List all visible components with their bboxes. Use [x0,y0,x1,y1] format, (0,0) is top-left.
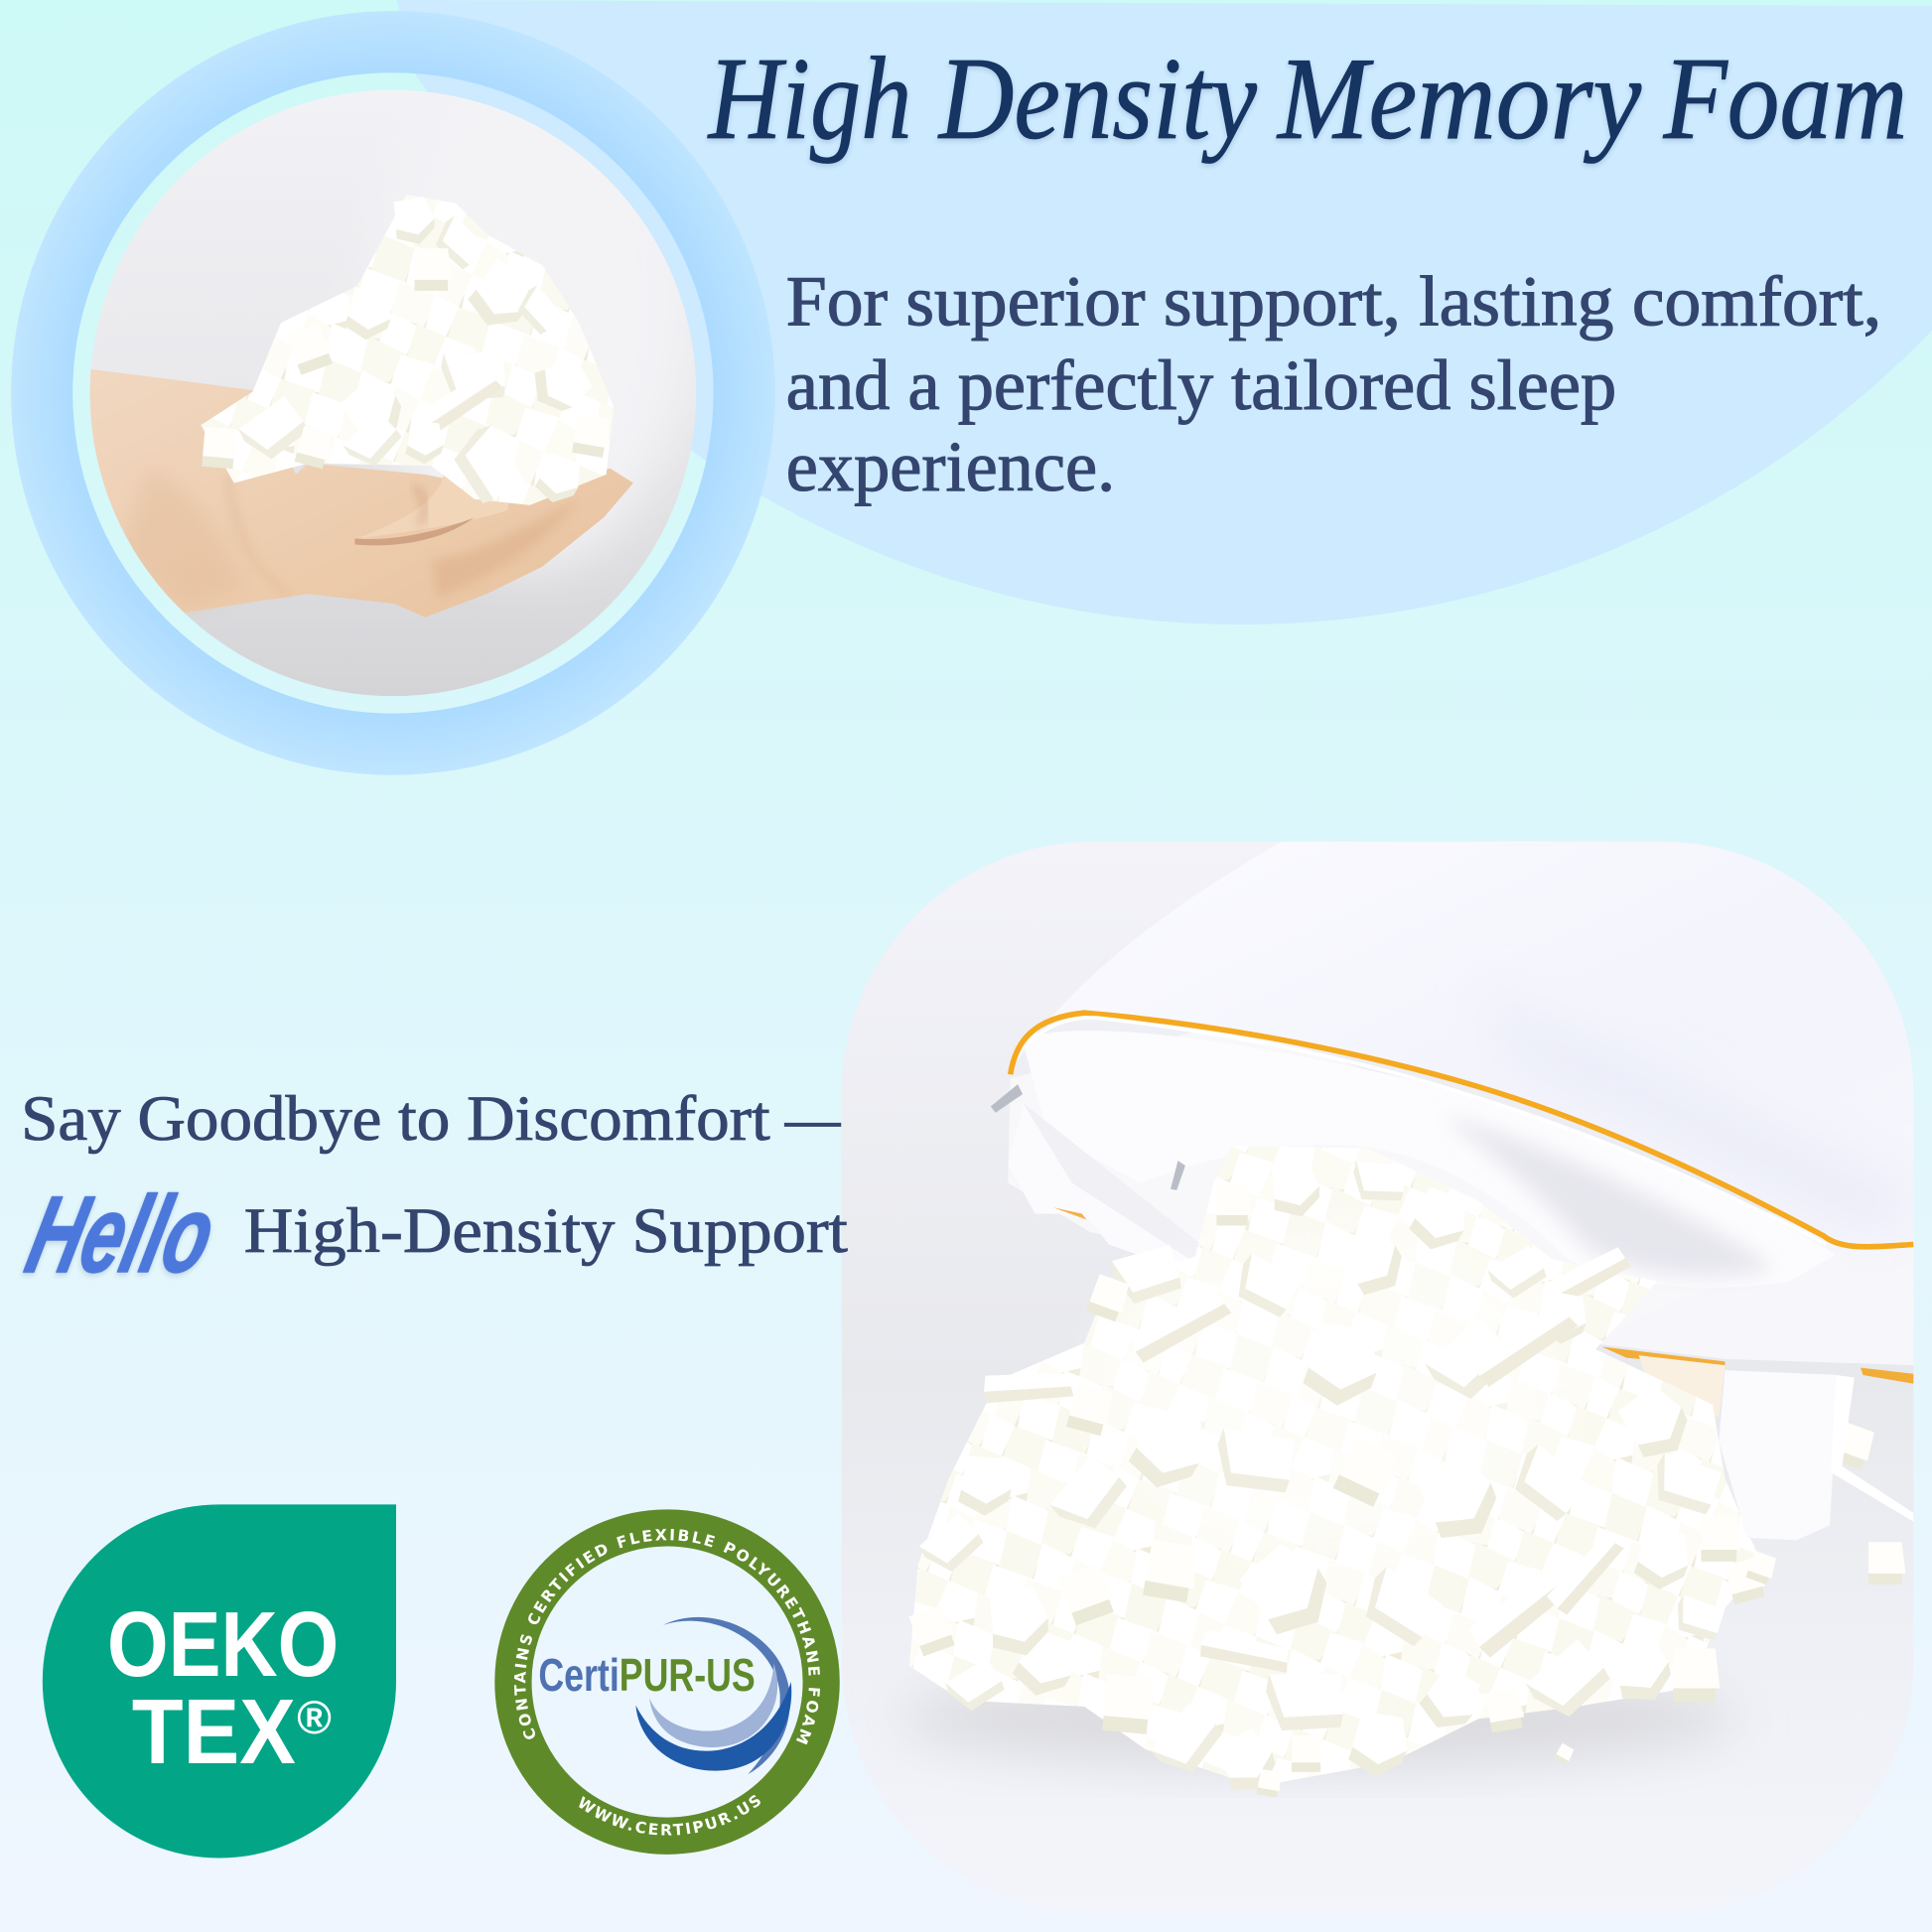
lower flap of pillow [1023,1191,1188,1263]
orange piping and zipper [1011,1013,1913,1247]
tagline [21,1082,848,1266]
OEKO-TEX badge: OEKO [107,1592,339,1696]
pillow lower right section [1600,1344,1914,1365]
tagline: — [784,1082,841,1154]
description text: For superior support, lasting comfort, [786,262,1881,342]
foam pile [909,1146,1905,1798]
description text: experience. [786,427,1115,506]
pillow top [1008,842,1913,1251]
CertiPUR-US wordmark: CertiPUR-US [538,1649,756,1701]
forearm and palm [89,369,633,618]
OEKO-TEX badge [43,1504,396,1859]
description text: and a perfectly tailored sleep [786,345,1616,425]
title [707,33,1907,164]
CertiPUR-US seal: WWW.CERTIPUR.US [579,1795,760,1836]
Hello script word: Hello [16,1174,226,1295]
pillow inner back and lower edge [1009,1031,1914,1332]
title: Density [937,33,1257,164]
CertiPUR-US seal [494,1509,840,1855]
OEKO-TEX badge: ® [297,1691,332,1743]
title: High [707,33,911,164]
tagline: High-Density Support [244,1194,848,1266]
CertiPUR-US seal: CONTAINS CERTIFIED FLEXIBLE POLYURETHANE FOAM [514,1529,820,1745]
care label and ties [1719,1370,1913,1540]
title: Foam [1663,33,1907,164]
foam in hand [201,195,614,510]
inner pillow opening [1025,1031,1730,1199]
OEKO-TEX badge: TEX [132,1680,296,1783]
photo: pillow with foam spilling out [842,842,1914,1798]
photo: hand holding shredded foam [73,50,696,696]
pile shadow [915,1690,1722,1778]
blue ring around hand photo [42,42,745,745]
zipper pulls [991,1084,1023,1113]
swoosh logo [635,1617,791,1774]
title: Memory [1276,33,1641,164]
description text [786,262,1881,506]
blue curved panel [397,0,1932,624]
thumb [357,475,510,538]
tagline: Say Goodbye to Discomfort [21,1082,770,1154]
